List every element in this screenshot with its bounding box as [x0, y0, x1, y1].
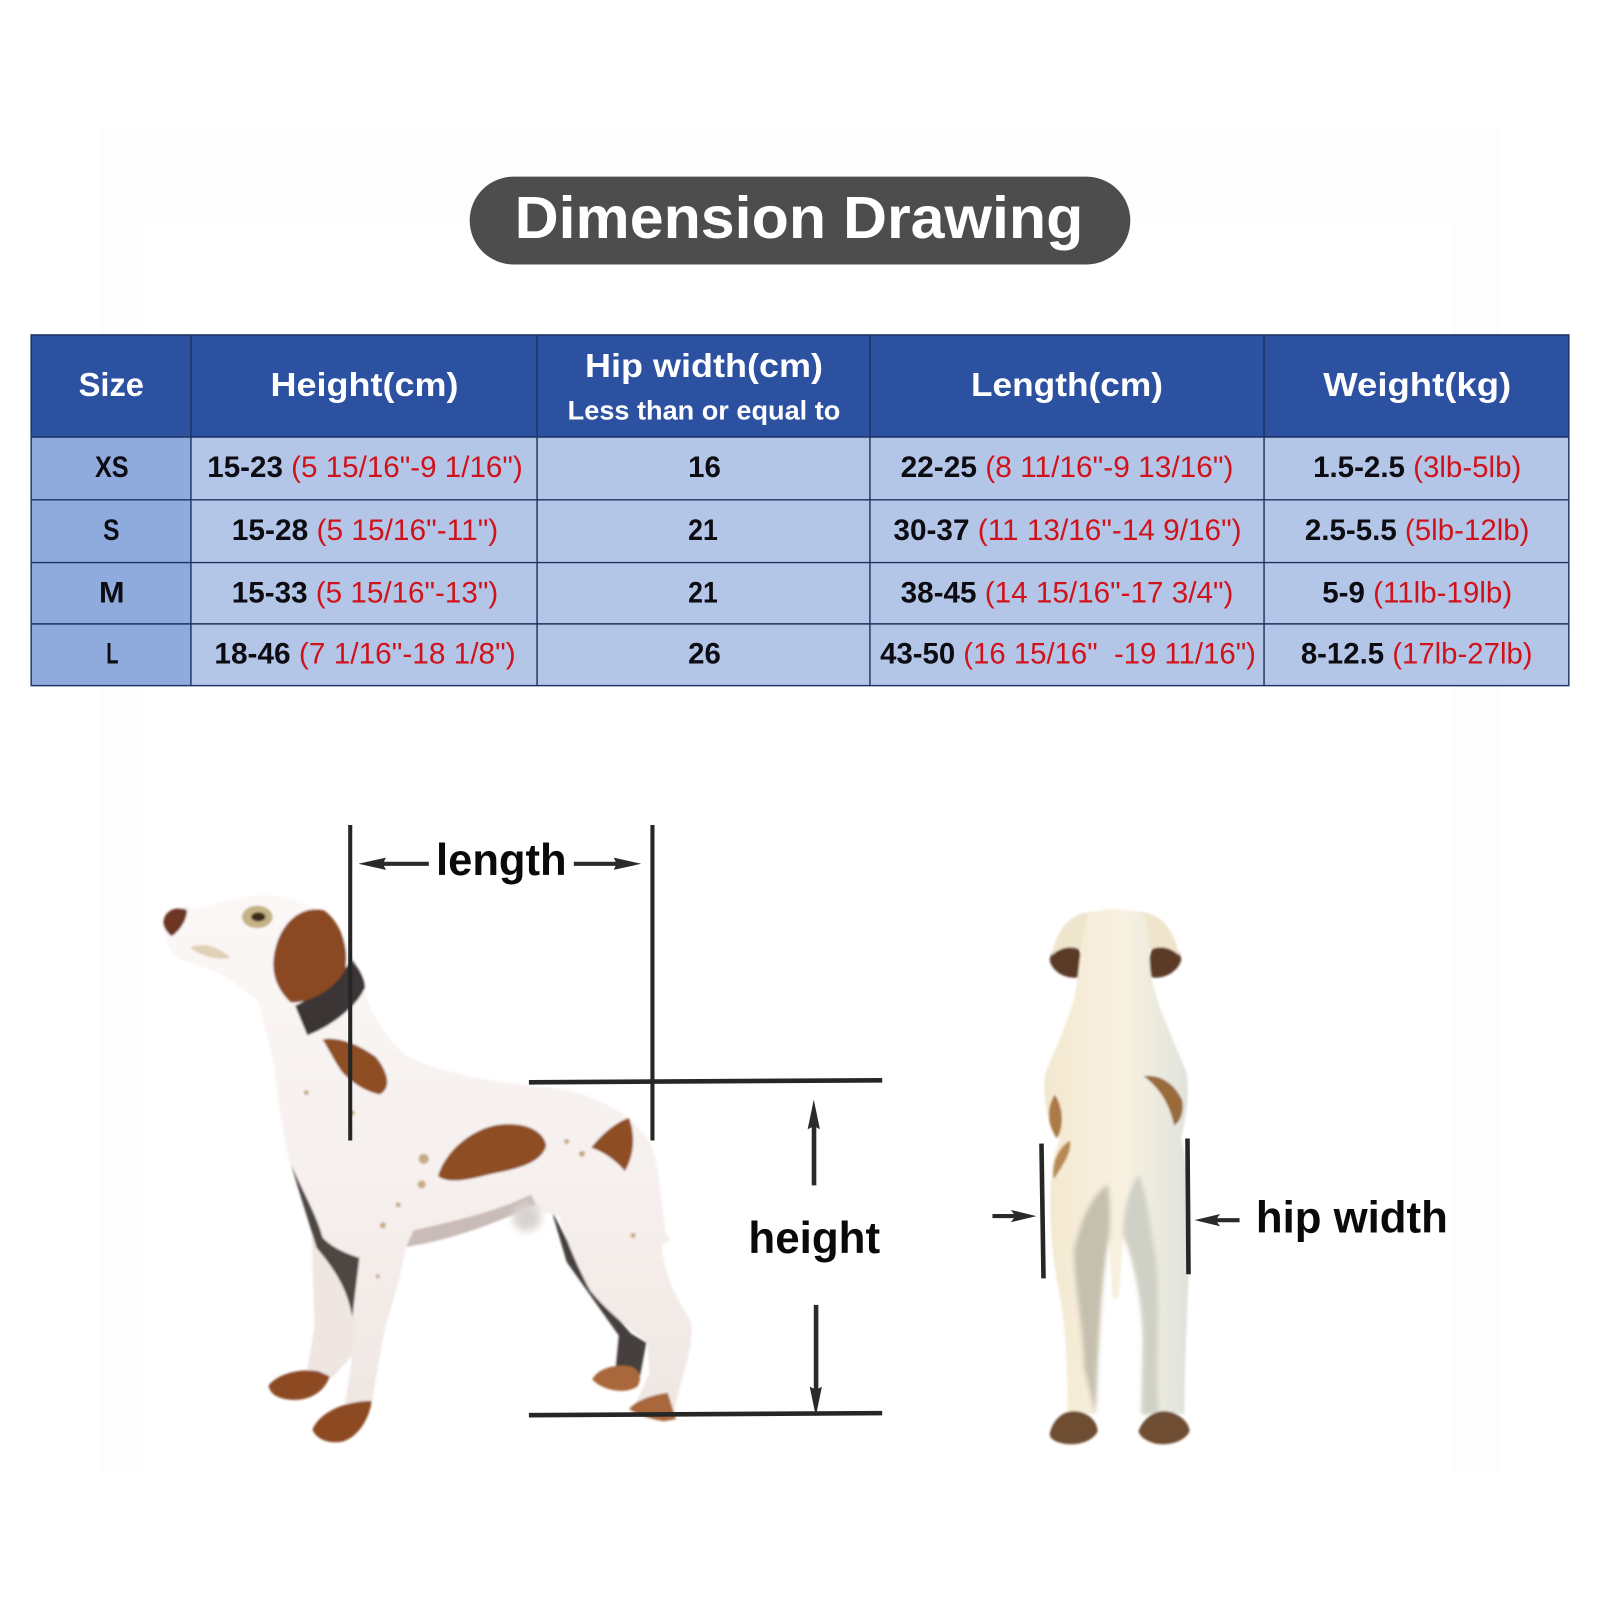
far front paw [269, 1370, 330, 1400]
header: hip width note: Less than or equal to [568, 396, 840, 426]
collar [295, 960, 365, 1035]
row XS: 22-25 (8 11/16"-9 13/16") [901, 451, 1233, 484]
row L: 8-12.5 (17lb-27lb) [1301, 638, 1533, 671]
far hind paw [592, 1366, 640, 1391]
right flank spot [1144, 1076, 1183, 1125]
row XS: 1.5-2.5 (3lb-5lb) [1313, 451, 1521, 484]
right ear [1149, 941, 1181, 978]
row L: 18-46 (7 1/16"-18 1/8") [214, 638, 516, 671]
body, head and near legs [163, 895, 692, 1414]
belly blur [513, 1203, 541, 1231]
size table [31, 335, 1569, 686]
row S [103, 514, 1530, 547]
header: height: Height(cm) [271, 367, 458, 404]
row M: 5-9 (11lb-19lb) [1322, 576, 1512, 609]
rear body [1044, 909, 1191, 1414]
left leg shading [1074, 1184, 1110, 1414]
row M [99, 576, 1512, 609]
label: length: length [436, 834, 567, 885]
row M: 21 [688, 576, 718, 609]
row S: 15-28 (5 15/16"-11") [232, 514, 498, 547]
hip guides [1041, 1138, 1188, 1278]
row XS [95, 451, 1521, 484]
label: hip width: hip width [1256, 1191, 1448, 1242]
row M: 38-45 (14 15/16"-17 3/4") [901, 576, 1233, 609]
near hind paw [629, 1393, 676, 1421]
right leg shading [1123, 1174, 1159, 1414]
illustration: dog side view [163, 895, 692, 1442]
muzzle freckles [190, 945, 231, 959]
row XS: 16 [688, 451, 721, 484]
header: size: Size [79, 367, 144, 404]
row S: S [103, 514, 119, 547]
height arrow down [810, 1305, 822, 1416]
near front paw [312, 1401, 372, 1442]
far hind leg [551, 1210, 646, 1375]
header: weight: Weight(kg) [1323, 367, 1511, 404]
hip arrow right [1195, 1214, 1240, 1226]
row XS: XS [95, 451, 129, 484]
header: hip width: Hip width(cm) [585, 348, 823, 385]
row L: 43-50 (16 15/16" -19 11/16") [880, 638, 1256, 671]
row L: 26 [688, 638, 721, 671]
left hip spot [1053, 1141, 1070, 1179]
label: height: height [748, 1212, 880, 1263]
illustration: dog rear view [1044, 909, 1191, 1444]
hip arrow left [992, 1210, 1036, 1222]
left rear paw [1050, 1411, 1098, 1444]
row S: 2.5-5.5 (5lb-12lb) [1305, 514, 1530, 547]
row M: M [99, 576, 125, 609]
eye [251, 912, 265, 921]
left flank spot [1049, 1095, 1062, 1138]
neck spot [323, 1039, 387, 1095]
header: length: Length(cm) [971, 367, 1163, 404]
row XS: 15-23 (5 15/16"-9 1/16") [207, 451, 523, 484]
height arrow up [808, 1100, 820, 1185]
row M: 15-33 (5 15/16"-13") [232, 576, 498, 609]
title pill [470, 177, 1130, 264]
length guides [350, 825, 652, 1141]
row L [106, 638, 1533, 671]
eye patch [242, 906, 273, 928]
row L: L [106, 638, 118, 671]
chest shadow [291, 1164, 359, 1317]
nose [163, 908, 187, 936]
title text: Dimension Drawing [515, 184, 1083, 251]
length arrows [358, 858, 641, 870]
right rear paw [1138, 1411, 1190, 1444]
far front leg [306, 1225, 368, 1378]
right ear flap [1136, 912, 1179, 956]
table header row [79, 348, 1511, 426]
row S: 30-37 (11 13/16"-14 9/16") [893, 514, 1242, 547]
belly shadow [406, 1195, 536, 1247]
row S: 21 [688, 514, 718, 547]
height guides [529, 1080, 882, 1415]
left ear [1050, 941, 1082, 978]
hip spot [591, 1118, 633, 1171]
speckles [304, 1090, 636, 1278]
left ear flap [1052, 912, 1095, 956]
shoulder spot [438, 1124, 546, 1181]
ear [273, 909, 346, 1003]
